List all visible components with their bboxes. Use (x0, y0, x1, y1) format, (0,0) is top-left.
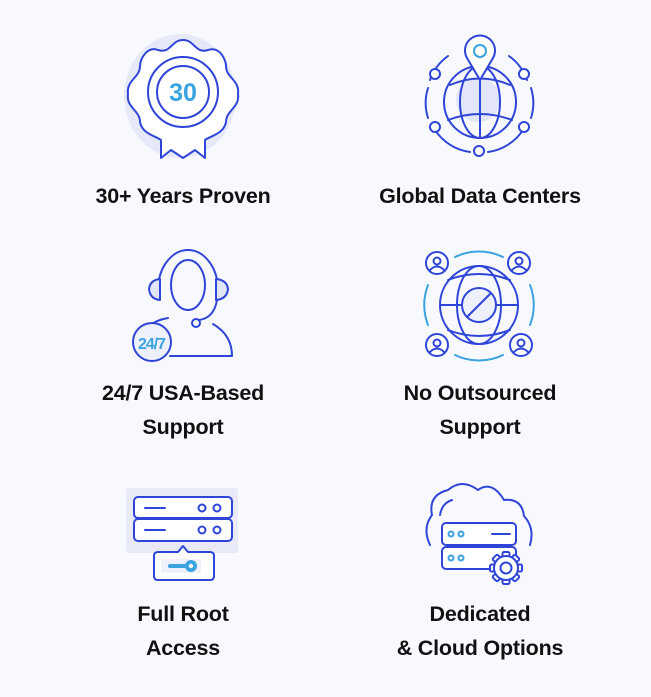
label: No Outsourced Support (404, 381, 556, 439)
label: 30+ Years Proven: 30+ Years Proven (95, 184, 271, 208)
icon: award badge (124, 34, 238, 158)
icon: globe with pin (426, 36, 533, 156)
icon: cloud server gear (426, 484, 532, 584)
label: Full Root Access: Full Root (137, 602, 229, 626)
label: No Outsourced Support: No Outsourced (404, 381, 556, 405)
label: Dedicated & Cloud Options (397, 602, 563, 660)
icon: award badge: 30 (169, 79, 197, 107)
label: 24/7 USA-Based Support: 24/7 USA-Based (102, 381, 264, 405)
label: Full Root Access: Access (146, 636, 220, 660)
icon: headset support agent: 24/7 (138, 336, 166, 353)
label: 24/7 USA-Based Support (102, 381, 264, 439)
label: Dedicated & Cloud Options: & Cloud Options (397, 636, 563, 660)
icon: globe no outsourcing (424, 251, 534, 361)
icon: headset support agent (133, 250, 232, 361)
label: Full Root Access (137, 602, 229, 660)
label: Global Data Centers: Global Data Centers (379, 184, 581, 208)
icon: server with key (126, 488, 238, 580)
label: Dedicated & Cloud Options: Dedicated (430, 602, 530, 626)
label: No Outsourced Support: Support (440, 415, 520, 439)
label: 24/7 USA-Based Support: Support (142, 415, 224, 439)
